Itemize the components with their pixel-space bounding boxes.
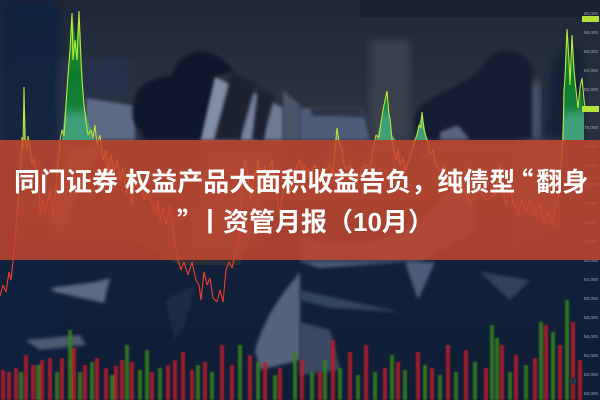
price axis labels: 82,000	[584, 87, 598, 92]
volume bars	[3, 300, 580, 400]
title: 同门证券 权益产品大面积收益告负，纯债型“ 翻身	[14, 162, 588, 199]
red title band	[0, 140, 600, 260]
green price tags	[582, 16, 599, 112]
price axis labels: 66,000	[584, 239, 598, 244]
price axis labels: 54,000	[584, 353, 598, 358]
price axis labels: 88,000	[584, 30, 598, 35]
price axis labels: 74,000	[584, 163, 598, 168]
price axis labels: 76,000	[584, 144, 598, 149]
price line chart	[0, 11, 585, 302]
small axis badge	[570, 378, 576, 384]
price axis labels: 58,000	[584, 315, 598, 320]
price axis labels: 84,000	[584, 68, 598, 73]
price axis labels: 56,000	[584, 334, 598, 339]
price axis labels: 72,000	[584, 182, 598, 187]
green area under price peaks	[24, 11, 584, 140]
price axis labels: 52,000	[584, 372, 598, 377]
price axis labels: 86,000	[584, 49, 598, 54]
price axis labels	[584, 11, 598, 396]
title	[14, 162, 588, 239]
seat shapes in photo	[25, 40, 585, 375]
price axis labels: 50,000	[584, 391, 598, 396]
price axis labels: 64,000	[584, 258, 598, 263]
price axis labels: 90,000	[584, 11, 598, 16]
ochre wash under price line	[15, 140, 562, 265]
price axis labels: 60,000	[584, 296, 598, 301]
price axis labels: 78,000	[584, 125, 598, 130]
price axis labels: 68,000	[584, 220, 598, 225]
price axis labels: 62,000	[584, 277, 598, 282]
price axis labels: 70,000	[584, 201, 598, 206]
title: ”丨资管月报（10月）	[177, 202, 434, 239]
